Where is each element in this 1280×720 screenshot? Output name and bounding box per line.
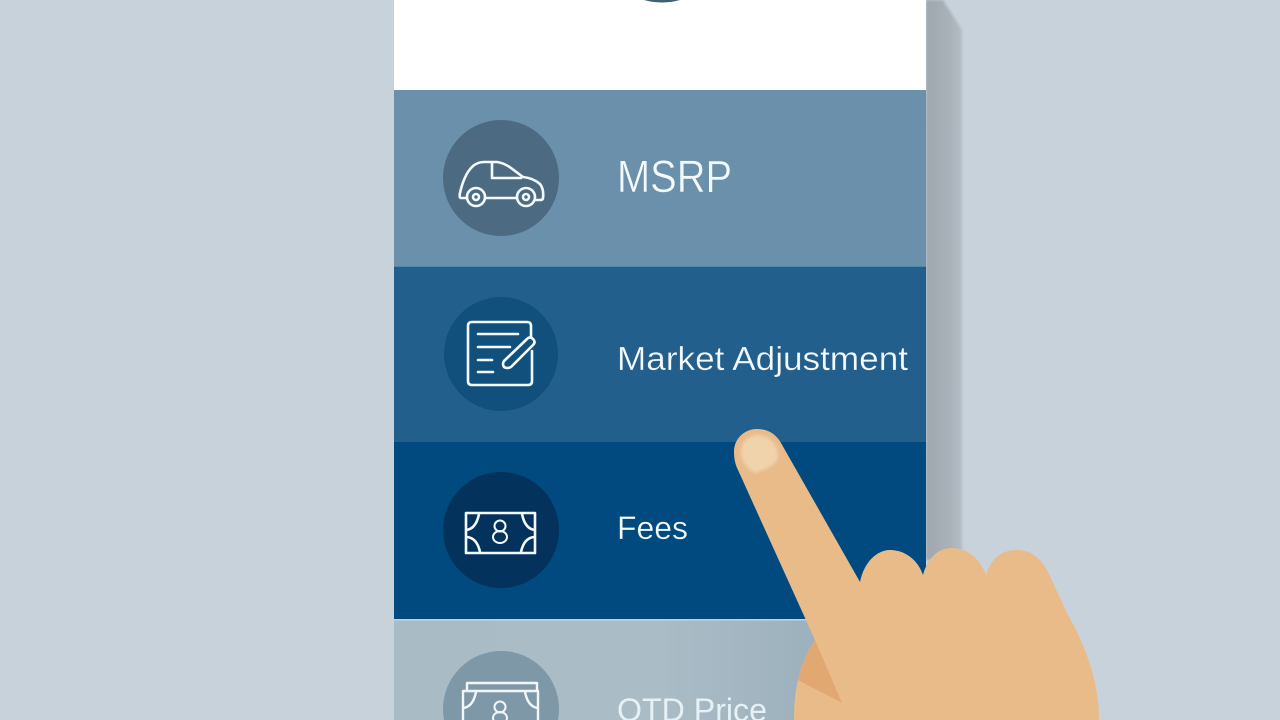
panel: MSRP row [394, 90, 926, 267]
panel: white header [394, 0, 926, 91]
icon: document with pen [444, 297, 558, 411]
panel: OTD Price row [394, 619, 926, 720]
label: Market Adjustment: Market Adjustment [617, 340, 908, 377]
icon: cropped header circle [638, 0, 686, 2]
icon: car [443, 120, 559, 236]
card drop shadow [926, 0, 962, 560]
label: Fees: Fees [617, 510, 688, 546]
panel: Fees row [394, 442, 926, 619]
icon: banknote [443, 472, 559, 588]
icon: stacked banknotes [443, 651, 559, 720]
label: MSRP: MSRP [617, 151, 732, 202]
finger nail [741, 435, 778, 473]
panel: Market Adjustment row [394, 266, 926, 443]
icon: pointing hand [734, 429, 1099, 720]
thumb shadow [798, 640, 842, 703]
